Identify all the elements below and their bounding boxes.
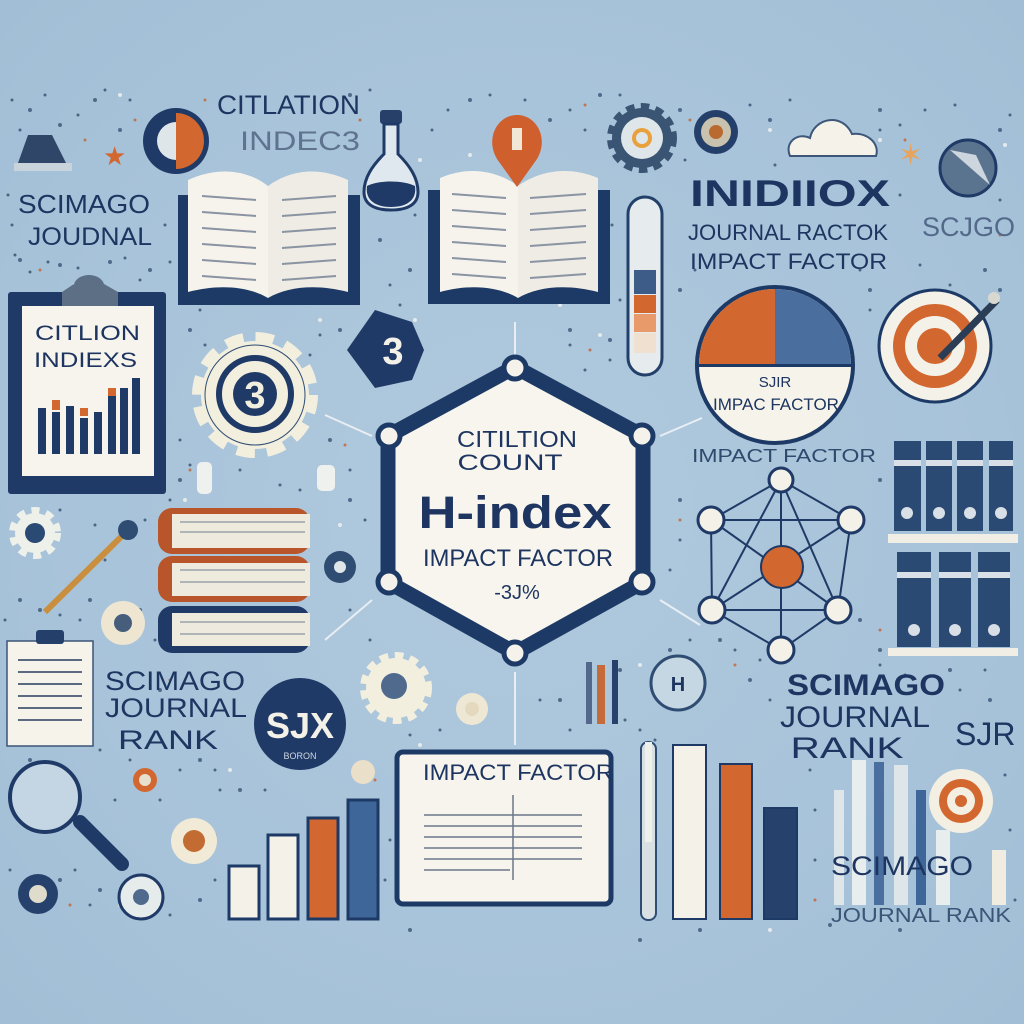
document page [7, 630, 93, 746]
SJX circle badge: BORON [283, 751, 317, 761]
text: scimago journal rank bottom: SCIMAGO [831, 851, 973, 881]
text: index journal impact factor: INIDIIOX [690, 173, 890, 214]
icon: small star: ✶ [898, 139, 923, 172]
icon: compass [940, 140, 996, 196]
shelves bottom binders [888, 552, 1018, 656]
sun badge [366, 658, 426, 718]
icon: round badge [694, 110, 738, 154]
text: scimago journal rank left: JOURNAL [105, 693, 247, 723]
clipboard: CITLION [35, 322, 140, 345]
SJX circle badge [254, 678, 346, 770]
hexagon text: COUNT [458, 450, 562, 475]
text: scjgo: SCJGO [922, 212, 1015, 242]
text: scimago journal: JOUDNAL [28, 223, 152, 251]
icons: small badges [18, 760, 375, 919]
panel: impact factor: IMPACT FACTOR [423, 760, 613, 785]
text: scimago journal rank right [780, 669, 945, 765]
hexagon text [418, 426, 613, 604]
icon: cloud [789, 120, 877, 156]
icon: flask [364, 110, 418, 210]
text: index journal impact factor: IMPACT FACTOR [690, 249, 887, 274]
bar chart right [673, 745, 797, 919]
target [879, 290, 1000, 402]
icon: round token [456, 693, 488, 725]
text: scimago journal rank left: SCIMAGO [105, 666, 245, 696]
small note card [197, 462, 335, 494]
icon: small gear left [15, 513, 55, 553]
thermometer [641, 742, 656, 920]
open book 2 with pin [428, 115, 610, 304]
test bars and flask: H [671, 674, 685, 696]
bar chart left [229, 800, 378, 919]
text: scimago journal rank right: RANK [790, 732, 904, 765]
text: citation index top [217, 90, 360, 156]
hexagon text: CITILTION [457, 426, 577, 452]
pie chart [697, 287, 853, 443]
icon: pie circle [143, 108, 209, 174]
text: impact factor: IMPACT FACTOR [692, 445, 876, 466]
clipboard [8, 275, 166, 494]
text: scimago journal rank right: SCIMAGO [787, 669, 945, 702]
text: scimago journal rank left: RANK [118, 725, 218, 755]
clipboard: INDIEXS [34, 349, 137, 372]
text: index journal impact factor: JOURNAL RACTOK [688, 220, 888, 245]
magnifier [10, 762, 122, 864]
network diagram [698, 468, 864, 663]
central hexagon [378, 357, 653, 664]
shelves top binders [888, 441, 1018, 543]
faded bar chart [834, 760, 1006, 905]
book stack [158, 508, 310, 653]
icon: test tube [628, 197, 662, 375]
text: index journal impact factor [688, 173, 890, 274]
big gear with 3: 3 [244, 375, 266, 417]
pie chart: IMPAC FACTOR [713, 395, 839, 414]
icon: gear top [612, 108, 672, 168]
SJX circle badge: SJX [266, 705, 334, 746]
icon: round node [324, 551, 356, 583]
test bars and flask [586, 656, 705, 724]
text: SJR: SJR [955, 716, 1015, 752]
text: scimago journal: SCIMAGO [18, 189, 150, 219]
open book 1 [178, 171, 360, 305]
icon: round tag [101, 601, 145, 645]
text: scimago journal [18, 189, 152, 251]
pie chart: SJIR [759, 374, 791, 391]
text: citation index top: INDEC3 [240, 126, 360, 156]
text: scimago journal rank bottom: JOURNAL RANK [831, 905, 1012, 927]
connector lines [325, 322, 702, 745]
hexagon text: IMPACT FACTOR [423, 545, 613, 572]
icon: folder [14, 135, 72, 171]
icon: star: ★ [103, 141, 126, 171]
panel: impact factor [397, 752, 613, 904]
hexagon text: -3J% [494, 582, 540, 604]
text: scimago journal rank left [105, 666, 247, 755]
big gear with 3 [201, 341, 309, 449]
text: scimago journal rank bottom [831, 851, 1012, 927]
text: citation index top: CITLATION [217, 90, 360, 120]
hexagon badge 3: 3 [382, 331, 404, 373]
target small [929, 769, 993, 833]
text: scimago journal rank right: JOURNAL [780, 701, 930, 734]
icon: wrench [45, 520, 138, 612]
hexagon badge 3 [347, 310, 424, 388]
hexagon text: H-index [418, 487, 612, 538]
